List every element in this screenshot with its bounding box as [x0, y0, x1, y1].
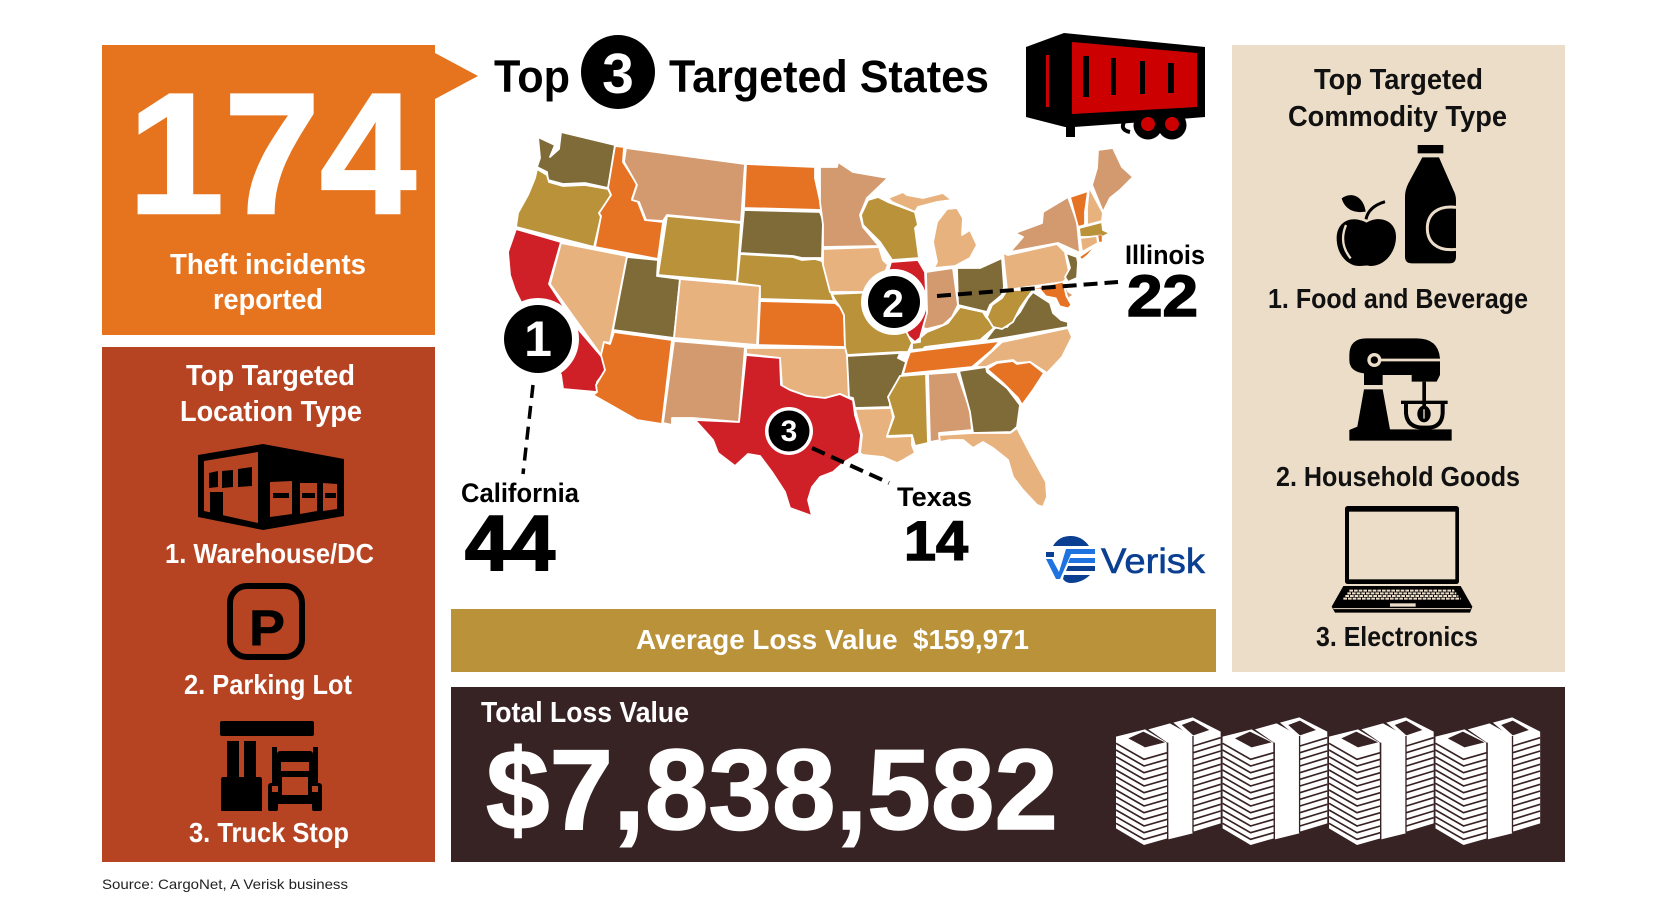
heading: commodity type: Top Targeted	[1314, 64, 1483, 96]
icon: apple and bottle	[1337, 145, 1456, 266]
pin 1: California: 1	[524, 311, 552, 367]
panel: top targeted commodity type	[1232, 45, 1565, 672]
leader line: California	[523, 385, 533, 474]
pin 2: Illinois: 2	[882, 283, 904, 326]
badge: number 3: 3	[602, 42, 634, 106]
big number: total loss: $7,838,582	[486, 727, 1058, 854]
icon: truck stop	[220, 721, 322, 811]
label: theft incidents reported: reported	[213, 284, 323, 316]
label: Illinois 22: 22	[1127, 264, 1198, 329]
label: Illinois 22	[1125, 240, 1205, 329]
label: household goods: 2. Household Goods	[1276, 461, 1520, 492]
heading text: targeted states: Targeted States	[669, 51, 989, 102]
pin 3: Texas	[765, 407, 813, 455]
map: contiguous US states	[508, 132, 1133, 516]
icon: warehouse	[198, 444, 344, 530]
icon: laptop	[1332, 506, 1472, 613]
wordmark: Verisk	[1101, 542, 1206, 581]
label: theft incidents reported: Theft incidents	[170, 249, 366, 281]
heading: commodity type: Commodity Type	[1288, 101, 1507, 133]
icon: stand mixer	[1349, 338, 1452, 441]
title: Top	[494, 51, 570, 102]
icon: cargo trailer	[1026, 33, 1205, 140]
label: electronics: 3. Electronics	[1316, 621, 1478, 652]
label: Texas 14	[897, 482, 972, 572]
panel: theft incidents	[102, 45, 478, 335]
heading: location type: Location Type	[180, 396, 362, 428]
pin 3: Texas: 3	[781, 415, 797, 448]
pin 2: Illinois	[861, 269, 927, 335]
source note: Source: CargoNet, A Verisk business	[102, 876, 348, 892]
panel: average loss value	[451, 609, 1216, 672]
label: truck stop: 3. Truck Stop	[189, 817, 349, 848]
label: California 44: 44	[465, 499, 555, 587]
label: California 44: California	[461, 478, 580, 508]
panel: top targeted location type	[102, 347, 435, 862]
logo: Verisk	[1046, 536, 1206, 583]
heading: location type: Top Targeted	[186, 360, 355, 392]
panel: total loss value	[451, 687, 1565, 862]
big number 174: 174	[128, 58, 416, 250]
badge: number 3	[581, 35, 655, 109]
heading: total loss value: Total Loss Value	[481, 697, 689, 729]
label: Texas 14: 14	[904, 509, 968, 572]
label: Texas 14: Texas	[897, 482, 972, 512]
label: parking lot: 2. Parking Lot	[184, 669, 352, 700]
leader line: Illinois	[937, 282, 1118, 296]
icon: parking sign	[230, 586, 302, 657]
pin 1: California	[497, 298, 579, 380]
leader line: Texas	[812, 448, 889, 483]
average loss text: Average Loss Value $159,971	[636, 624, 1029, 655]
label: California 44	[461, 478, 580, 587]
label: warehouse: 1. Warehouse/DC	[165, 538, 374, 569]
title	[494, 35, 989, 109]
icon: parking sign: P	[249, 600, 285, 656]
icon: stacks of money	[1116, 717, 1540, 845]
label: food and beverage: 1. Food and Beverage	[1268, 283, 1528, 314]
label: Illinois 22: Illinois	[1125, 240, 1205, 270]
